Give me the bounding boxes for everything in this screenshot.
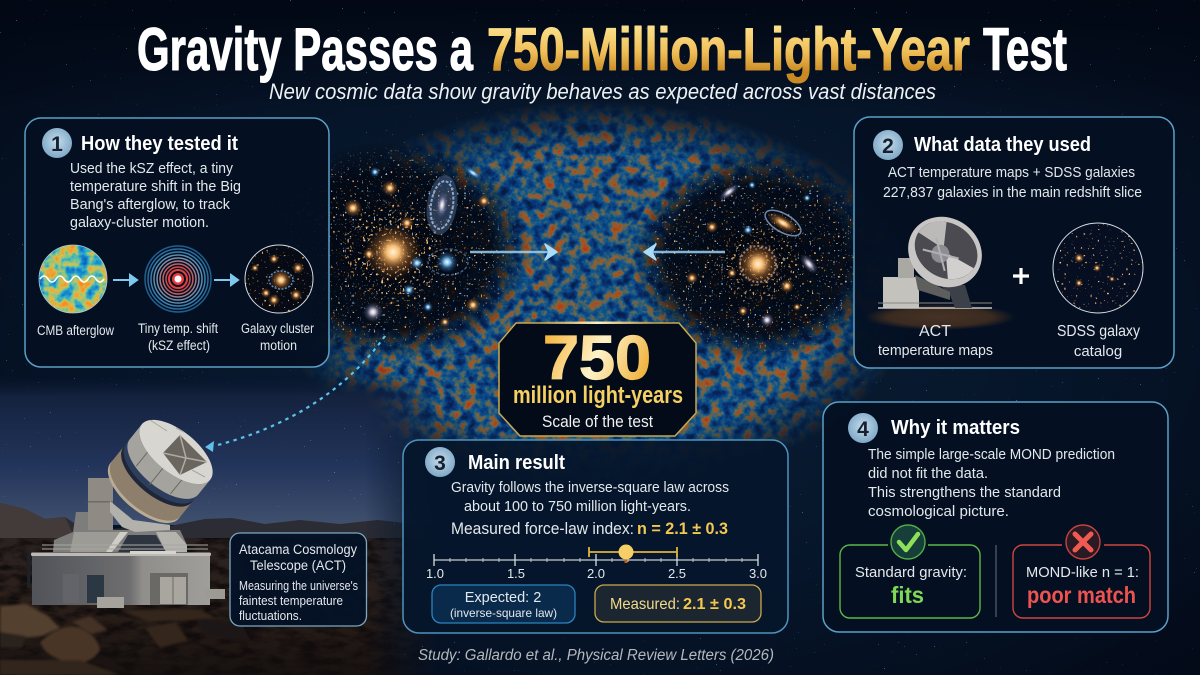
box: standard gravity fits: fits [891,582,924,608]
title [137,16,1067,83]
panel: why it matters [823,402,1168,632]
force-law index line: n = 2.1 ± 0.3 [637,519,728,538]
body text: ACT temperature maps + SDSS galaxies [888,164,1135,181]
badge: 750 million light-years: Scale of the test [542,412,653,431]
number badge 3: 3 [434,452,446,475]
box: expected: (inverse-square law) [450,606,557,620]
box: MOND poor match [1013,525,1150,618]
arrow [214,275,238,285]
arrow: left cluster moving right [470,244,557,260]
body text: The simple large-scale MOND prediction [868,446,1115,463]
body text [451,479,729,515]
box: measured: 2.1 ± 0.3 [683,596,746,613]
icon: tiny temperature shift rings [145,246,211,312]
icon: CMB afterglow [39,245,107,313]
badge: 750 million light-years: 750 [543,324,651,393]
icon labels: CMB afterglow [37,323,114,338]
icon labels: ACT [919,323,951,340]
dotted arrow from cosmic map to telescope [205,336,385,452]
icon: ACT telescope [865,203,1015,330]
dish interior [150,420,207,477]
body text [883,164,1142,201]
title: Gravity Passes a [137,16,473,83]
box: measured: Measured: [610,596,680,613]
body text: galaxy-cluster motion. [70,214,209,231]
callout: Atacama Cosmology Telescope: faintest temperature [239,594,343,608]
callout: Atacama Cosmology Telescope [230,533,366,626]
plus sign [1013,268,1029,284]
icon: SDSS galaxy catalog [1053,223,1143,313]
badge: 750 million light-years [499,322,696,436]
galaxy cluster: left [286,144,529,358]
force-law index line: Measured force-law index: [451,519,634,538]
number line chart: 2.0 [587,566,605,581]
number badge 4: 4 [857,418,869,441]
number badge 3 [425,447,455,477]
body text: did not fit the data. [868,465,988,482]
title: Test [983,16,1067,83]
number badge 4 [848,413,878,443]
support arm [110,501,170,532]
telescope [27,408,225,608]
heading: How they tested it [81,133,238,155]
number badge 2 [873,130,903,160]
body text [70,160,241,231]
night sky [0,375,450,525]
icon: cross mark [1066,525,1100,559]
number badge 1 [42,128,72,158]
body text: temperature shift in the Big [70,178,241,195]
box: expected: Expected: 2 [465,590,541,606]
desert ground [0,538,450,675]
upper deck [53,512,187,552]
panel: main result [403,440,788,633]
body text: Gravity follows the inverse-square law across [451,479,729,496]
arrow: right cluster moving left [644,244,725,260]
galaxy cluster: right [634,158,856,360]
title: 750-Million-Light-Year [487,16,970,83]
telescope scene [0,375,450,675]
box: standard gravity fits: Standard gravity: [855,564,967,581]
arrow [113,275,137,285]
callout: Atacama Cosmology Telescope: Atacama Cosmology [239,542,357,557]
subtitle: New cosmic data show gravity behaves as expected across vast distances [269,79,936,104]
divider [995,545,997,617]
panel: what data they used [854,117,1174,368]
number badge 1: 1 [51,133,63,156]
badge: 750 million light-years: million light-years [513,382,683,409]
icon: galaxy cluster [245,245,313,313]
callout: Atacama Cosmology Telescope: fluctuations. [239,609,302,623]
foreground rocks [0,604,252,675]
number line chart: 1.5 [507,566,525,581]
body text: This strengthens the standard [868,484,1061,501]
body text: cosmological picture. [868,503,1009,520]
callout: Atacama Cosmology Telescope: Telescope (ACT) [250,558,346,573]
source citation: Study: Gallardo et al., Physical Review Letters (2026) [418,647,774,664]
number line chart: 3.0 [749,566,767,581]
icon: check mark [891,525,925,559]
box: expected [432,585,575,623]
tower [88,478,113,530]
dish cylinder [108,420,213,523]
icon labels: motion [260,338,297,353]
box: standard gravity fits [840,525,980,618]
body text: 227,837 galaxies in the main redshift slice [883,184,1142,201]
heading: Why it matters [891,417,1020,439]
icon labels: Galaxy cluster [241,321,314,336]
icon labels: Tiny temp. shift [138,321,218,336]
cosmic map: background nebula with two galaxy clusters [286,103,884,454]
heading: Main result [468,452,565,474]
box: measured [595,585,761,622]
body text: about 100 to 750 million light-years. [464,498,691,515]
spiral galaxy [423,173,461,237]
icon labels: temperature maps [878,342,993,359]
box: MOND poor match: MOND-like n = 1: [1026,564,1139,581]
panel: how they tested it [25,118,329,367]
number line chart: 2.5 [668,566,686,581]
icon labels [878,323,1140,360]
callout: Atacama Cosmology Telescope: Measuring the universe's [239,579,358,593]
body text: Used the kSZ effect, a tiny [70,160,233,177]
icon labels: SDSS galaxy [1057,323,1140,340]
heading: What data they used [914,134,1091,156]
icon labels: catalog [1074,343,1122,360]
number line chart: 1.0 [426,566,444,581]
CMB temperature map [306,103,884,454]
number badge 2: 2 [882,135,894,158]
icon labels [37,321,314,353]
body text: Bang's afterglow, to track [70,196,230,213]
icon labels: (kSZ effect) [148,338,210,353]
measured value with error bar [589,544,677,563]
body text [868,446,1115,520]
number line chart [426,544,767,581]
mountains [0,503,402,538]
box: MOND poor match: poor match [1027,582,1136,608]
round base [32,556,210,605]
